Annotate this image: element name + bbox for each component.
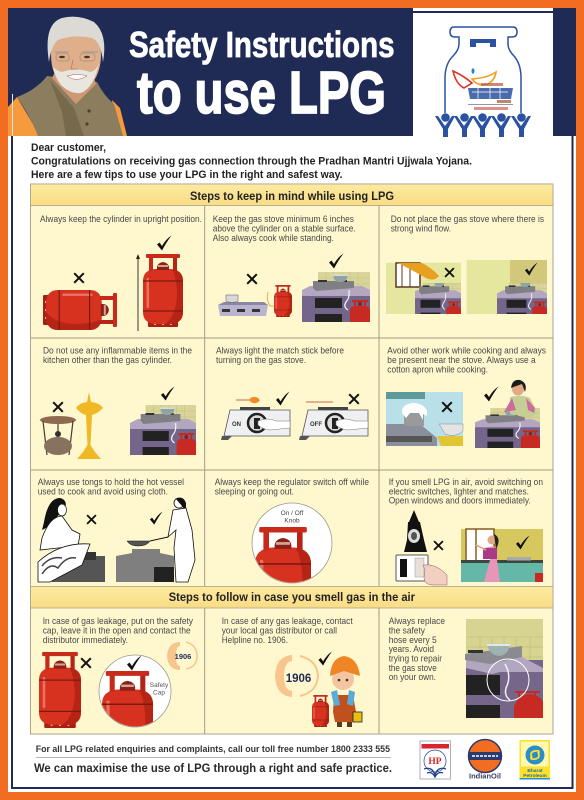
panel: smell LPG: electric switches, lighter and matches. bbox=[389, 486, 529, 496]
panel: gas leakage safety cap: 1906 bbox=[175, 652, 191, 661]
panel: tongs vs cloth: Always use tongs to hold the hot vessel bbox=[38, 477, 184, 487]
panel: inflammable items bbox=[40, 346, 196, 459]
panel: upright cylinder bbox=[40, 214, 202, 331]
panel: stove above cylinder bbox=[213, 214, 370, 322]
panel: call helpline: your local gas distributor or call bbox=[222, 626, 337, 636]
panel: gas leakage safety cap: Cap bbox=[153, 690, 165, 696]
panel: wind flow bbox=[386, 214, 547, 319]
panel: regulator off: Knob bbox=[284, 518, 300, 524]
panel: replace hose: the safety bbox=[389, 626, 426, 636]
panel: gas leakage safety cap bbox=[39, 618, 198, 728]
panel: replace hose: trying to repair bbox=[389, 654, 442, 664]
footer: closing message: We can maximise the use of LPG through a right and safe practice. bbox=[34, 763, 392, 775]
panel: regulator off bbox=[214, 478, 369, 584]
footer: helpline text: For all LPG related enquiries and complaints, call our toll free number 1800 2333 555 bbox=[36, 744, 390, 754]
heading: steps when you smell gas bbox=[30, 586, 553, 608]
panel: match stick ON bbox=[216, 346, 344, 440]
panel: stove above cylinder: above the cylinder on a stable surface. bbox=[213, 224, 356, 234]
panel: match stick ON: Always light the match stick before bbox=[216, 346, 344, 356]
greeting text bbox=[31, 142, 472, 181]
panel: stove above cylinder: Also always cook while standing. bbox=[213, 233, 334, 243]
panel: attend while cooking bbox=[386, 346, 547, 448]
panel: replace hose: the gas stove bbox=[389, 663, 437, 673]
panel: attend while cooking: be present near the stove. Always use a bbox=[387, 355, 536, 365]
panel: wind flow: Do not place the gas stove where there is bbox=[391, 214, 545, 224]
panel: upright cylinder: Always keep the cylinder in upright position. bbox=[40, 214, 202, 224]
panel: smell LPG: If you smell LPG in air, avoid switching on bbox=[389, 477, 543, 487]
panel: table background bbox=[30, 184, 553, 734]
logo: HP: HP bbox=[428, 757, 442, 767]
panel: attend while cooking: cotton apron while cooking. bbox=[387, 364, 488, 374]
panel: tongs vs cloth bbox=[38, 477, 195, 582]
panel: attend while cooking: Avoid other work while cooking and always bbox=[387, 346, 547, 356]
title: Safety Instructions bbox=[129, 24, 394, 65]
panel: call helpline: Helpline no. 1906. bbox=[222, 635, 288, 645]
panel: call helpline bbox=[222, 616, 362, 727]
logo: Bharat Petroleum: Petroleum bbox=[523, 773, 547, 779]
logo: Ujjwala Yojana bbox=[413, 8, 553, 137]
heading: steps while using LPG bbox=[30, 184, 553, 206]
panel: call helpline: In case of any gas leakage, contact bbox=[222, 616, 353, 626]
panel: smell LPG: Open windows and doors immediately. bbox=[389, 496, 531, 506]
panel: gas leakage safety cap: distributor immediately. bbox=[43, 635, 128, 645]
panel: tongs vs cloth: used to cook and avoid using cloth. bbox=[38, 486, 168, 496]
panel: smell LPG bbox=[389, 477, 543, 585]
logo: HP bbox=[420, 741, 450, 779]
panel: regulator off: sleeping or going out. bbox=[215, 486, 294, 496]
panel: replace hose: Always replace bbox=[389, 616, 445, 626]
portrait bbox=[8, 17, 127, 136]
title bbox=[129, 24, 394, 126]
panel: call helpline: 1906 bbox=[286, 673, 311, 685]
panel: stove above cylinder: Keep the gas stove minimum 6 inches bbox=[213, 214, 355, 224]
title: to use LPG bbox=[137, 60, 386, 126]
panel: regulator off: Always keep the regulator switch off while bbox=[215, 477, 369, 487]
panel: gas leakage safety cap: cap, leave it in the open and contact the bbox=[43, 626, 191, 636]
greeting text: Congratulations on receiving gas connection through the Pradhan Mantri Ujjwala Yojana. bbox=[31, 156, 472, 168]
panel: match stick ON: turning on the gas stove. bbox=[216, 355, 306, 365]
panel: inflammable items: Do not use any inflammable items in the bbox=[43, 346, 192, 356]
logo: Bharat Petroleum: Bharat bbox=[527, 768, 543, 774]
panel: replace hose: on your own. bbox=[389, 672, 436, 682]
logo: IndianOil: IndianOil bbox=[469, 772, 501, 781]
panel: replace hose bbox=[389, 616, 543, 718]
panel: gas leakage safety cap: In case of gas leakage, put on the safety bbox=[43, 616, 194, 626]
panel: match stick ON: ON bbox=[232, 422, 241, 428]
heading: steps while using LPG: Steps to keep in mind while using LPG bbox=[190, 191, 394, 203]
greeting text: Here are a few tips to use your LPG in the right and safest way. bbox=[31, 169, 342, 181]
logo: Bharat Petroleum bbox=[520, 740, 550, 780]
panel: match stick OFF: OFF bbox=[310, 422, 322, 428]
panel: replace hose: hose every 5 bbox=[389, 635, 437, 645]
heading: steps when you smell gas: Steps to follow in case you smell gas in the air bbox=[169, 592, 416, 604]
panel: wind flow: strong wind flow. bbox=[391, 224, 451, 234]
panel: replace hose: years. Avoid bbox=[389, 644, 434, 654]
panel: gas leakage safety cap: Safety bbox=[150, 682, 169, 689]
panel: inflammable items: kitchen other than the gas cylinder. bbox=[43, 355, 172, 365]
panel: regulator off: On / Off bbox=[281, 510, 304, 517]
header band bbox=[8, 8, 576, 136]
panel: match stick OFF bbox=[299, 394, 368, 440]
greeting text: Dear customer, bbox=[31, 142, 106, 154]
logo: IndianOil bbox=[468, 740, 502, 781]
